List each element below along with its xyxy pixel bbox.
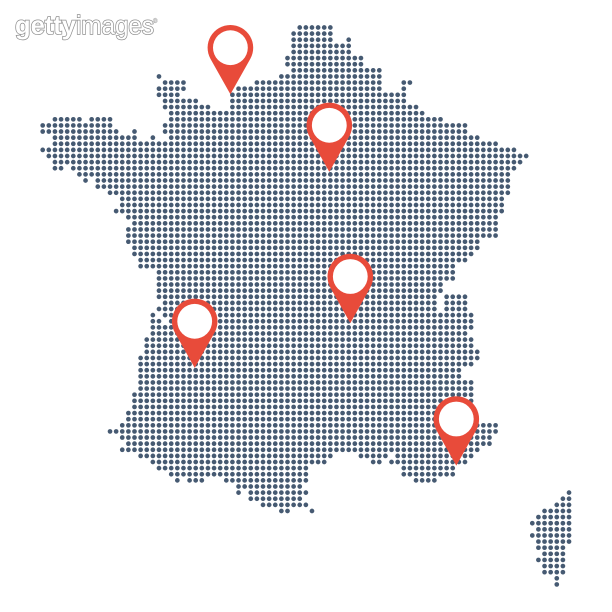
watermark logo: ® bbox=[153, 18, 158, 25]
watermark logo: getty bbox=[15, 10, 77, 40]
location pin: south west bbox=[172, 299, 218, 368]
location pin: Paris region bbox=[306, 103, 352, 172]
watermark logo: images bbox=[76, 10, 154, 40]
location pin: north coast bbox=[208, 25, 253, 94]
watermark logo bbox=[15, 10, 158, 40]
location pin: south east bbox=[434, 396, 479, 466]
dotted map: mainland France bbox=[43, 28, 526, 511]
dotted map: Corsica bbox=[532, 493, 569, 584]
location pin: central France bbox=[328, 254, 373, 323]
